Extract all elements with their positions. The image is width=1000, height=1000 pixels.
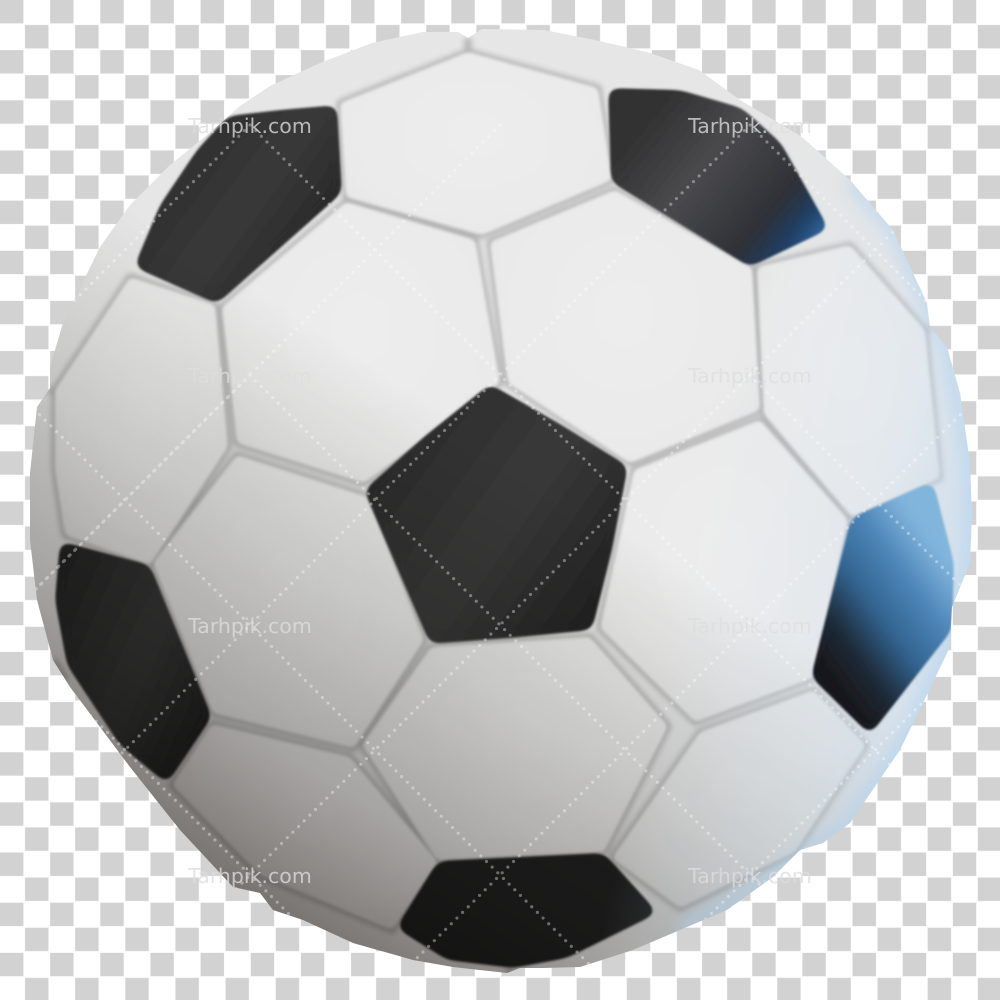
watermark text: Tarhpik.com (687, 864, 812, 888)
watermark text: Tarhpik.com (687, 114, 812, 138)
watermark text (187, 114, 812, 888)
white hexagon: upper centre-left (222, 202, 500, 483)
white hexagon: upper centre-right (490, 190, 760, 463)
watermark text: Tarhpik.com (687, 614, 812, 638)
black pentagon: upper right, blue lit (608, 88, 829, 267)
white hexagon: lower right (600, 420, 848, 722)
blue light tint, right (626, 272, 972, 926)
black pentagon: left (55, 541, 212, 784)
watermark text: Tarhpik.com (187, 864, 312, 888)
white hexagon: far left (55, 277, 228, 565)
watermark text: Tarhpik.com (687, 364, 812, 388)
white hexagon: top (340, 52, 612, 235)
watermark dotted lattice (36, 123, 962, 964)
watermark text: Tarhpik.com (187, 114, 312, 138)
watermark text: Tarhpik.com (187, 614, 312, 638)
black pentagon: bottom (396, 853, 658, 968)
black pentagon: centre (364, 384, 628, 644)
blue rim glow (680, 180, 970, 930)
white hexagon: bottom centre (362, 637, 668, 860)
warm lighting, lower left (30, 244, 866, 973)
black pentagon: right, blue lit (811, 481, 954, 735)
white hexagon: bottom right (612, 690, 866, 908)
white hexagon: right (757, 245, 940, 517)
white hexagon: bottom left (172, 724, 438, 930)
watermark text: Tarhpik.com (187, 364, 312, 388)
white hexagon: lower left (153, 455, 424, 748)
black pentagon: upper left (134, 105, 342, 304)
